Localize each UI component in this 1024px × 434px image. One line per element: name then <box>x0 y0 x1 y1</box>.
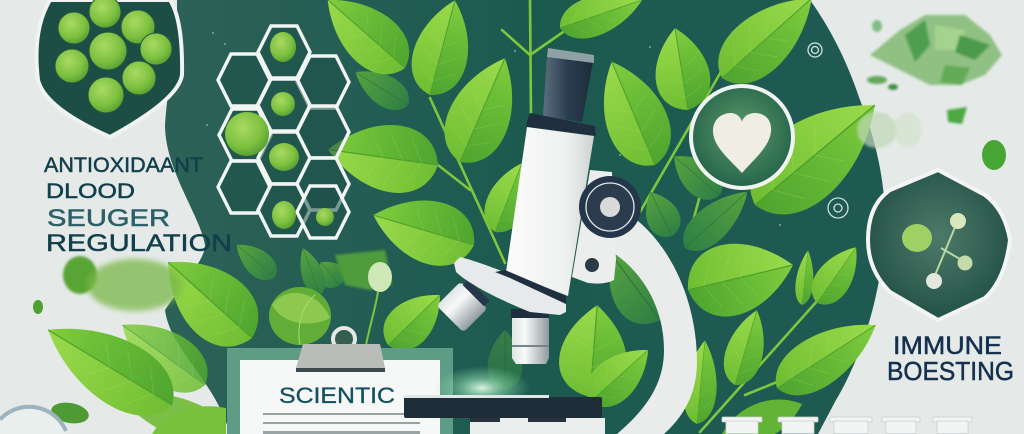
heading: left benefits: SEUGER <box>47 205 170 232</box>
stage base <box>470 418 605 434</box>
heading: left benefits: DLOOD <box>46 180 135 203</box>
heading: immune boosting: IMMUNE <box>893 332 1002 360</box>
arm pod <box>572 170 616 284</box>
eyepiece cap <box>547 48 594 63</box>
clip <box>296 328 385 372</box>
tube collar <box>526 113 596 136</box>
green dot <box>982 140 1006 170</box>
nosepiece dark band <box>495 270 566 304</box>
heart badge <box>691 86 793 188</box>
heading: left benefits <box>44 154 232 257</box>
dark green central panel <box>165 0 885 434</box>
leaves: centre lower cluster <box>556 303 662 418</box>
specks on dark panel <box>206 32 781 226</box>
leaves: top centre cluster <box>310 0 649 275</box>
small blurred leaves left <box>33 256 183 426</box>
text lines <box>263 413 420 434</box>
light glow under objective <box>434 366 530 410</box>
green peas <box>55 0 172 113</box>
antioxidant shield icon <box>36 0 182 137</box>
round bud leaf <box>269 287 331 345</box>
microscope <box>404 48 697 434</box>
stage <box>404 397 602 418</box>
clipboard title: SCIENTIC <box>279 383 395 408</box>
molecule <box>902 213 972 289</box>
arch <box>612 205 697 434</box>
immune shield icon <box>868 170 1010 320</box>
heading: immune boosting: BOESTING <box>887 356 1014 386</box>
swirl icons <box>808 43 848 218</box>
leaves: lower left cluster <box>31 235 455 434</box>
leaves: right cluster <box>584 0 900 434</box>
scattered green fragments <box>857 15 1002 148</box>
right objective <box>511 309 549 364</box>
nosepiece <box>454 257 566 315</box>
leaves behind the microscope <box>293 59 759 390</box>
heading: left benefits: ANTIOXIDAANT <box>44 154 203 177</box>
heading: immune boosting <box>887 332 1014 386</box>
blossom buds <box>335 250 392 345</box>
clipboard <box>227 328 453 434</box>
arm dot <box>585 258 599 272</box>
heading: left benefits: REGULATION <box>46 230 232 257</box>
focus knob <box>579 176 641 238</box>
tube <box>506 127 594 296</box>
hexagon grid with peas <box>218 26 349 238</box>
eyepiece <box>543 56 593 122</box>
test tubes <box>722 417 972 434</box>
stems <box>430 0 818 432</box>
left objective <box>437 277 492 332</box>
magnifier <box>0 407 66 434</box>
